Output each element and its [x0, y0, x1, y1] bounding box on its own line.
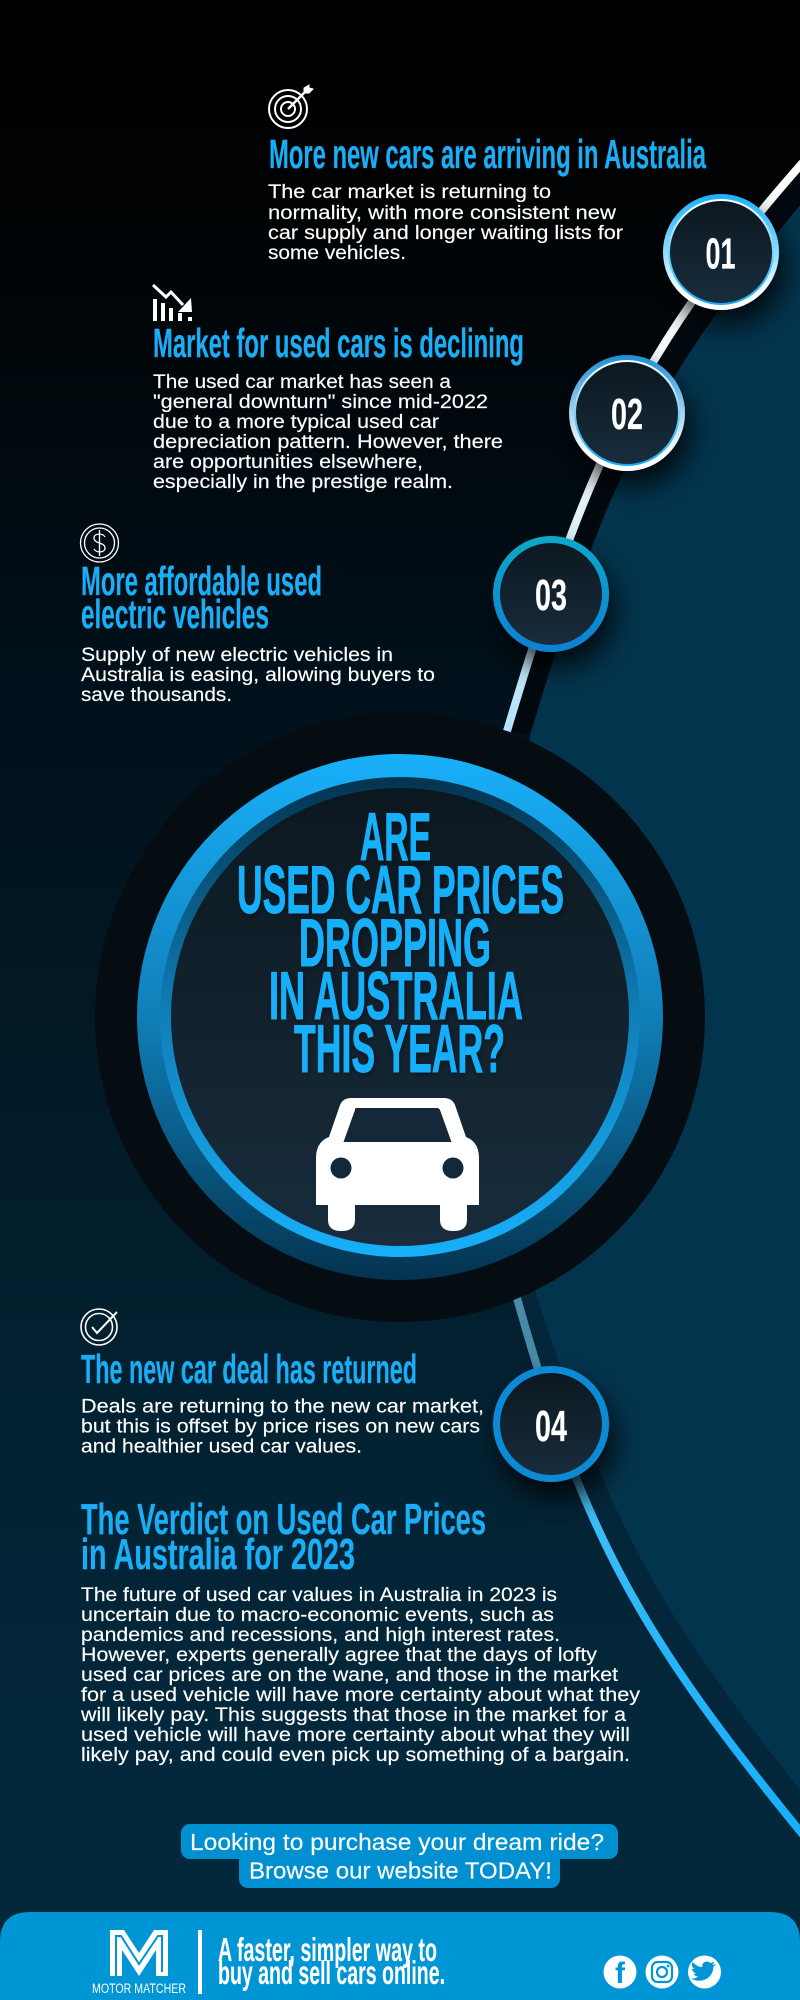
outer dark disc	[95, 712, 705, 1322]
central title circle	[95, 712, 705, 1322]
inner disc	[171, 788, 629, 1246]
body text: and healthier used car values.	[81, 1436, 362, 1458]
body text: save thousands.	[81, 685, 232, 706]
body text: depreciation pattern. However, there	[153, 432, 503, 453]
icon: dollar coin	[80, 524, 118, 562]
number badge 02: 02	[611, 390, 643, 439]
section 4: new car deal	[81, 1309, 484, 1458]
body text: likely pay, and could even pick up something of a bargain.	[81, 1745, 630, 1766]
number badge 04	[493, 1366, 609, 1482]
body text	[81, 1396, 484, 1458]
number badge 04: 04	[535, 1402, 567, 1451]
call to action: Looking to purchase your dream ride?	[190, 1829, 604, 1855]
tagline: A faster, simpler way to	[218, 1931, 437, 1968]
heading: The Verdict on Used Car Prices	[81, 1495, 486, 1544]
body text	[268, 182, 624, 264]
body text: uncertain due to macro-economic events, such as	[81, 1605, 554, 1626]
section 3: affordable used EVs	[80, 524, 435, 706]
body text: The used car market has seen a	[153, 372, 451, 393]
logo	[92, 1930, 186, 1996]
icon: facebook	[604, 1956, 636, 1990]
divider	[198, 1930, 202, 1994]
body text: used vehicle will have more certainty about what they will	[81, 1725, 630, 1746]
heading	[81, 558, 322, 637]
body text: normality, with more consistent new	[268, 203, 616, 224]
upper dark band	[507, 165, 800, 735]
call to action	[181, 1824, 618, 1888]
body text: pandemics and recessions, and high interest rates.	[81, 1625, 560, 1646]
heading: in Australia for 2023	[81, 1530, 355, 1579]
body text: "general downturn" since mid-2022	[153, 392, 488, 413]
body text: used car prices are on the wane, and those in the market	[81, 1665, 619, 1686]
heading: electric vehicles	[81, 591, 269, 637]
body text: The car market is returning to	[268, 182, 551, 203]
heading: More affordable used	[81, 558, 322, 604]
body text: due to a more typical used car	[153, 412, 440, 433]
lower dark band	[517, 1291, 800, 1831]
icon: declining chart	[153, 285, 192, 321]
icon: car front	[316, 1098, 479, 1231]
section 2: used car market declining	[153, 285, 524, 493]
body text: However, experts generally agree that the days of lofty	[81, 1645, 598, 1666]
number badge 03: 03	[535, 571, 567, 620]
icon: instagram	[646, 1956, 678, 1988]
body text: Deals are returning to the new car market,	[81, 1396, 484, 1418]
body text: for a used vehicle will have more certainty about what they	[81, 1685, 641, 1706]
body text	[80, 1585, 641, 1766]
logo: MOTOR MATCHER	[92, 1981, 186, 1996]
title: IN AUSTRALIA	[269, 958, 523, 1034]
blue ring	[137, 754, 663, 1280]
body text: car supply and longer waiting lists for	[268, 223, 624, 244]
upper curved line	[507, 160, 800, 731]
number badge 01	[663, 194, 779, 310]
lower curved line	[517, 1298, 800, 1836]
number badge 02	[569, 355, 685, 471]
body text: some vehicles.	[268, 243, 406, 264]
body text	[153, 372, 503, 493]
title: ARE	[360, 799, 431, 875]
number badge 03	[493, 536, 609, 652]
tagline: buy and sell cars online.	[218, 1954, 445, 1991]
verdict section	[80, 1495, 641, 1766]
body text: Australia is easing, allowing buyers to	[81, 665, 435, 686]
icon: facebook: f	[615, 1957, 626, 1990]
heading	[81, 1495, 486, 1579]
title: THIS YEAR?	[294, 1011, 505, 1087]
heading: Market for used cars is declining	[153, 320, 524, 366]
section 1: new cars arriving	[268, 85, 707, 264]
icon: check badge	[81, 1309, 117, 1345]
heading: The new car deal has returned	[81, 1346, 417, 1392]
icon: target	[269, 85, 313, 128]
body text: especially in the prestige realm.	[153, 472, 453, 493]
icon: twitter	[688, 1956, 721, 1988]
body text: but this is offset by price rises on new cars	[81, 1416, 480, 1438]
call to action: Browse our website TODAY!	[249, 1858, 552, 1884]
body text	[81, 645, 435, 706]
title	[237, 799, 564, 1087]
body text: are opportunities elsewhere,	[153, 452, 423, 473]
footer bar	[0, 1912, 800, 2000]
tagline	[218, 1931, 445, 1991]
number badge 01: 01	[706, 230, 736, 278]
body text: Supply of new electric vehicles in	[81, 645, 393, 666]
body text: The future of used car values in Australia in 2023 is	[81, 1585, 557, 1606]
title: DROPPING	[299, 905, 491, 981]
right teal curved panel	[530, 205, 800, 1790]
body text: will likely pay. This suggests that those in the market for a	[80, 1705, 626, 1726]
